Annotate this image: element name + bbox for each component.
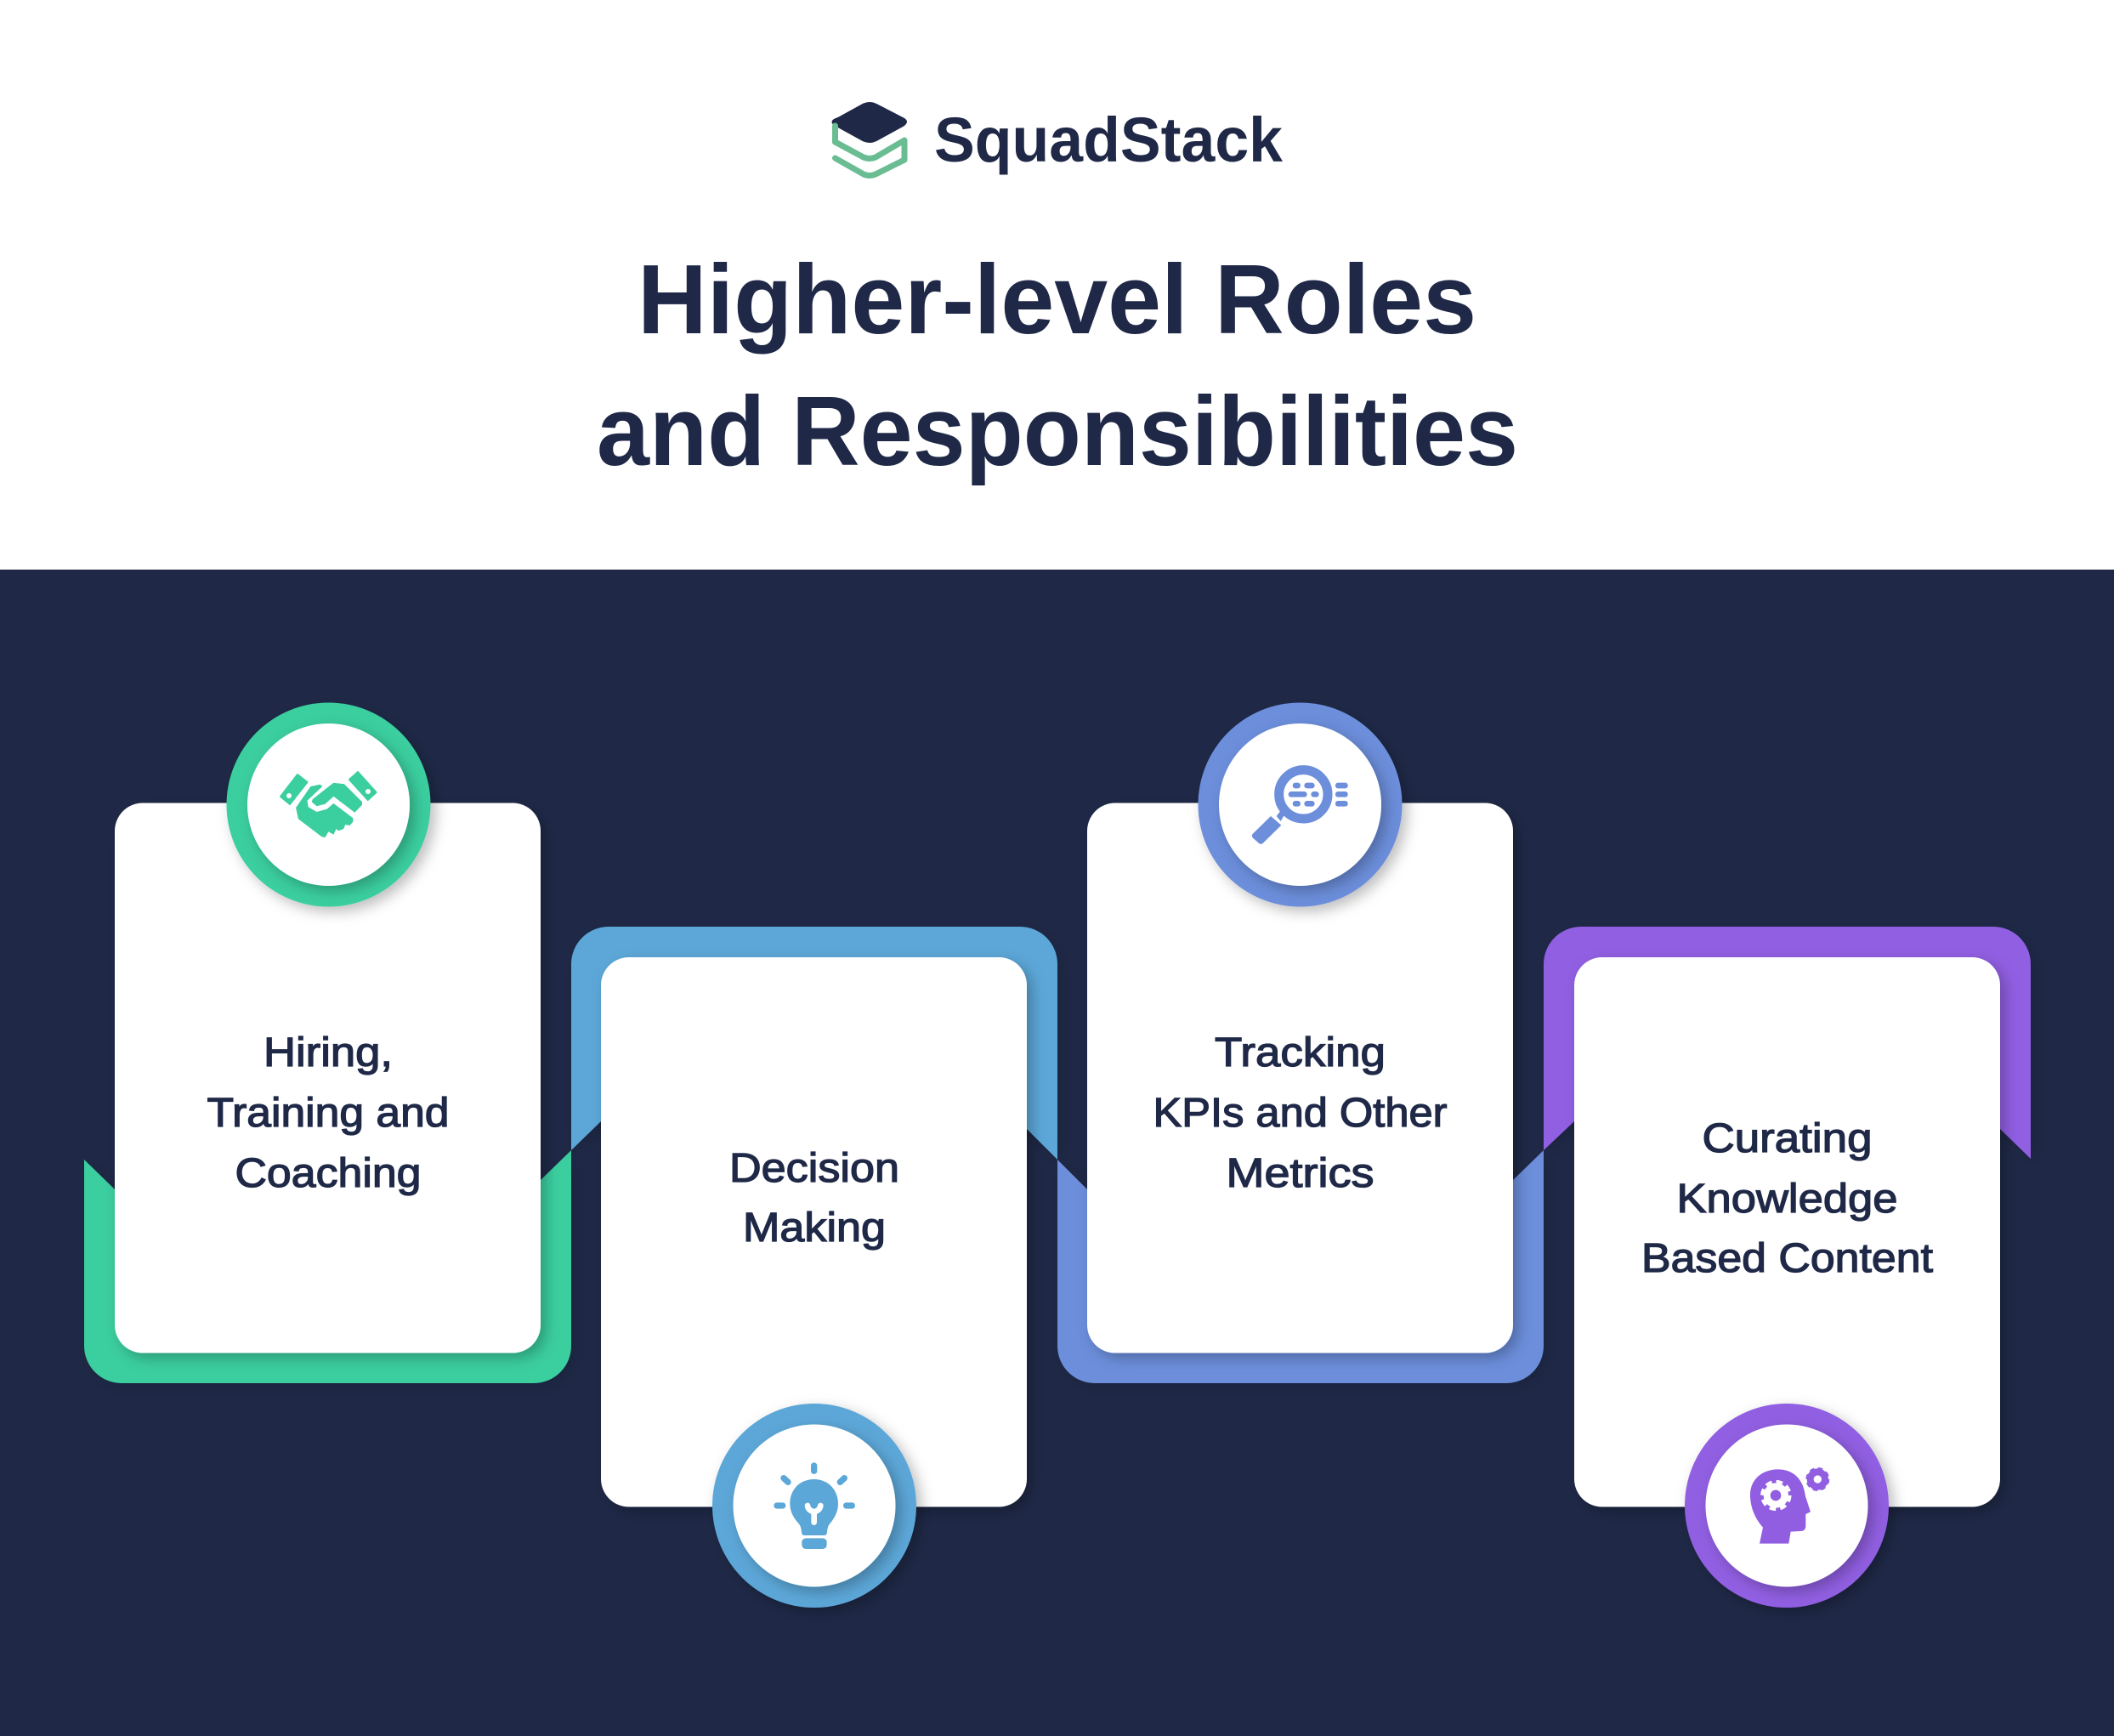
title: and Responsibilities bbox=[597, 376, 1518, 486]
card text: KPIs and Other bbox=[1153, 1091, 1448, 1136]
icon badge: magnifier bbox=[1199, 702, 1403, 906]
dark navy background panel bbox=[0, 570, 2114, 1736]
card text: Metrics bbox=[1226, 1151, 1374, 1196]
icon: head with gears bbox=[1750, 1469, 1828, 1544]
white card bbox=[601, 957, 1027, 1506]
card text bbox=[729, 1146, 899, 1251]
title bbox=[597, 244, 1518, 486]
logo wordmark: SquadStack bbox=[934, 105, 1284, 175]
logo icon: stacked layers bbox=[833, 103, 906, 175]
periwinkle frame bbox=[1057, 1150, 1544, 1383]
card text: Knowledge bbox=[1676, 1177, 1897, 1222]
icon badge: head with gears bbox=[1685, 1404, 1889, 1608]
panel: decision making bbox=[571, 927, 1057, 1608]
white card bbox=[1087, 803, 1513, 1353]
card text bbox=[1641, 1116, 1933, 1281]
green frame bbox=[84, 1150, 571, 1383]
panel: tracking KPIs and other metrics bbox=[1057, 702, 1544, 1383]
card text: Tracking bbox=[1215, 1030, 1386, 1075]
icon badge: handshake bbox=[226, 702, 430, 906]
card text: Making bbox=[743, 1206, 886, 1251]
blue frame bbox=[571, 927, 1057, 1160]
white card bbox=[115, 803, 541, 1353]
icon badge: light bulb bbox=[712, 1404, 916, 1608]
card text: Hiring, bbox=[264, 1030, 393, 1075]
card text bbox=[1153, 1030, 1448, 1196]
logo: SquadStack bbox=[833, 103, 1284, 175]
white card bbox=[1574, 957, 2000, 1506]
panel: hiring, training and coaching bbox=[84, 702, 571, 1383]
card text: Training and bbox=[207, 1091, 449, 1136]
icon: magnifier over data bbox=[1252, 770, 1348, 844]
card text: Coaching bbox=[235, 1151, 422, 1196]
title: Higher-level Roles bbox=[638, 244, 1476, 355]
card text: Curating bbox=[1702, 1116, 1872, 1161]
purple frame bbox=[1544, 927, 2031, 1159]
panel: curating knowledge based content bbox=[1544, 927, 2031, 1608]
icon: light bulb bbox=[777, 1466, 852, 1549]
card text: Decision bbox=[729, 1146, 899, 1191]
card text: Based Content bbox=[1641, 1236, 1933, 1281]
icon: handshake bbox=[281, 772, 377, 837]
card text bbox=[207, 1030, 449, 1196]
white header background bbox=[0, 0, 2114, 570]
